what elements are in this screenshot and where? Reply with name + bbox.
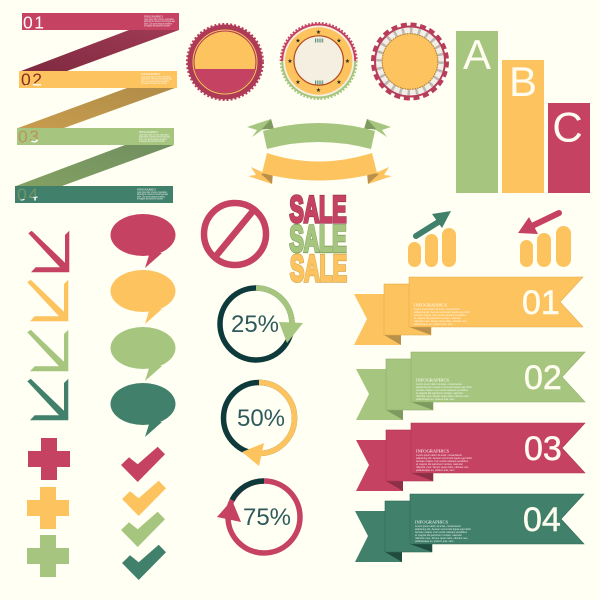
bar 03: [17, 126, 174, 146]
ribbon banner: green: [247, 119, 391, 149]
bar 03: adipiscing elit. Aenean commodo ligula eget: [139, 135, 170, 139]
bar 01: et magnis dis parturient montes: [144, 24, 170, 28]
ribbon 03: 03: [524, 430, 562, 468]
bar 04: et magnis dis parturient montes: [137, 197, 163, 201]
ribbon 03: ridiculus mus. Donec quam felis, ultricies nec,: [416, 465, 469, 469]
sale green: [290, 218, 346, 260]
ribbon 01: adipiscing elit. Aenean commodo ligula eget dolor: [414, 310, 470, 314]
speech bubble teal: [110, 383, 176, 437]
progress ring 75%: [217, 481, 300, 553]
bar 03: et magnis dis parturient montes: [139, 139, 165, 143]
ribbon 03: Aenean massa. Cum sociis natoque penatibus: [416, 459, 469, 463]
ribbon 04: adipiscing elit. Aenean commodo ligula eget dolor: [415, 527, 471, 531]
ribbon 01: pellentesque eu, pretium quis, sem.: [414, 322, 453, 326]
bar 02: dolor. Cum sociis natoque penatibus: [141, 79, 169, 83]
fold 3: [16, 145, 174, 186]
ribbon 02: et magnis dis parturient montes, nascetur: [416, 391, 463, 395]
bar A: A: [463, 31, 491, 78]
sale yellow: SALE: [290, 248, 347, 289]
badge: star ring seal: ★: [336, 38, 342, 44]
arrow yellow: [27, 280, 68, 321]
ribbon 04: INFOGRAPHICS: [415, 520, 448, 524]
sale green: SALE: [290, 218, 346, 260]
zigzag numbered banner: [15, 12, 179, 204]
fold 1: [21, 30, 179, 71]
speech bubble crimson: [110, 214, 176, 268]
bar 01: dolor. Cum sociis natoque penatibus: [144, 21, 172, 25]
bar 04: Lorem ipsum dolor sit amet, consectetuer: [137, 190, 167, 194]
check teal: [122, 545, 166, 580]
bar 01: 01: [23, 12, 44, 32]
icon: prohibition sign: [204, 203, 266, 265]
icon: falling bars with arrow: [518, 213, 571, 267]
check yellow: [122, 481, 166, 516]
ribbon 02: 02: [524, 359, 562, 397]
progress ring 50%: 50%: [237, 405, 285, 432]
badge: star ring seal: ★: [287, 58, 293, 65]
cross crimson: [28, 438, 70, 480]
arrow teal: [27, 379, 68, 420]
bar 02: adipiscing elit. Aenean commodo ligula eget: [141, 77, 172, 81]
ribbon 02: ridiculus mus. Donec quam felis, ultricies nec,: [416, 394, 469, 398]
arrow green: [27, 330, 68, 371]
speech bubble yellow: [110, 270, 176, 324]
ribbon 01: [354, 277, 583, 345]
ribbon 02: pellentesque eu, pretium quis, sem.: [416, 397, 455, 401]
ribbon banner: yellow: [248, 153, 392, 184]
ribbon 02: Aenean massa. Cum sociis natoque penatibus: [416, 388, 469, 392]
check green: [121, 512, 165, 547]
badge: star ring seal: ★: [336, 79, 342, 86]
arrow crimson: [28, 231, 69, 272]
ribbon 01: 01: [522, 284, 560, 322]
ribbon 04: pellentesque eu, pretium quis, sem.: [415, 539, 454, 543]
bar 04: dolor. Cum sociis natoque penatibus: [137, 194, 165, 198]
check crimson: [121, 447, 165, 482]
badge: star ring seal: ★: [345, 58, 350, 65]
badge: star ring seal: ★: [295, 79, 301, 86]
bar 02: INFOGRAPHICS: [141, 73, 160, 76]
bar 03: dolor. Cum sociis natoque penatibus: [139, 137, 167, 141]
bar 02: 02: [21, 70, 42, 90]
bar 01: Lorem ipsum dolor sit amet, consectetuer: [144, 17, 174, 21]
bar 03: INFOGRAPHICS: [139, 131, 158, 134]
bar 04: INFOGRAPHICS: [137, 188, 156, 192]
sale crimson: SALE: [290, 189, 346, 230]
ribbon 04: ridiculus mus. Donec quam felis, ultricies nec,: [415, 536, 468, 540]
bar B: B: [509, 58, 537, 105]
bar 01: [22, 12, 179, 32]
ribbon 02: INFOGRAPHICS: [416, 378, 449, 382]
bar 04: adipiscing elit. Aenean commodo ligula eget: [137, 192, 168, 196]
bar B: [502, 58, 544, 193]
icon: rising bars with arrow: [408, 211, 456, 267]
progress ring 75%: 75%: [243, 504, 291, 531]
ribbon 03: et magnis dis parturient montes, nascetur: [416, 462, 463, 466]
ribbon 02: adipiscing elit. Aenean commodo ligula eget dolor: [416, 385, 472, 389]
bar 03: 03: [18, 126, 39, 146]
bar C: C: [552, 104, 583, 150]
ribbon 02: [356, 352, 585, 420]
progress ring 25%: 25%: [231, 311, 279, 338]
bar A: [456, 31, 498, 193]
ribbon 03: adipiscing elit. Aenean commodo ligula eget dolor: [416, 456, 472, 460]
badge: star ring seal: [281, 23, 357, 99]
cross yellow: [27, 487, 69, 529]
bar 01: adipiscing elit. Aenean commodo ligula eget: [144, 19, 175, 23]
progress ring 25%: [220, 288, 303, 360]
SALE stickers: [290, 189, 347, 289]
ribbon 01: ridiculus mus. Donec quam felis, ultricies nec,: [414, 319, 467, 323]
ribbon 04: Aenean massa. Cum sociis natoque penatibus: [415, 530, 468, 534]
ribbon 04: Lorem ipsum dolor sit amet, consectetuer: [415, 524, 461, 528]
bar 04: 04: [17, 184, 38, 204]
cross green: [27, 535, 69, 577]
sale crimson: [290, 189, 346, 230]
ribbon 01: Lorem ipsum dolor sit amet, consectetuer: [414, 307, 460, 311]
bar C: [548, 103, 590, 193]
bar 04: [15, 184, 173, 204]
sale yellow: [290, 248, 347, 289]
ribbon 03: INFOGRAPHICS: [416, 448, 449, 454]
sale crimson: SALE: [290, 189, 346, 230]
stepped bars A B C: [456, 31, 590, 193]
ribbon 02: Lorem ipsum dolor sit amet, consectetuer: [416, 382, 462, 386]
sale yellow: SALE: [290, 248, 347, 289]
ribbon 01: et magnis dis parturient montes, nascetur: [414, 316, 461, 320]
sale green: SALE: [290, 218, 346, 260]
ribbon 01: INFOGRAPHICS: [414, 302, 447, 308]
bar 02: et magnis dis parturient montes: [141, 81, 167, 85]
badge: star ring seal: ★: [316, 87, 321, 94]
bar 02: Lorem ipsum dolor sit amet, consectetuer: [141, 74, 171, 78]
ribbon 04: [355, 494, 584, 562]
ribbon 03: [356, 423, 585, 491]
bar 02: [19, 70, 177, 90]
speech bubble green: [110, 327, 176, 381]
badge: star ring seal: ★: [295, 38, 301, 44]
ribbon 03: Lorem ipsum dolor sit amet, consectetuer: [416, 453, 462, 457]
badge: star ring seal: ★: [316, 29, 321, 36]
progress ring 50%: [224, 382, 294, 466]
ribbon 01: Aenean massa. Cum sociis natoque penatibus: [414, 313, 467, 317]
badge: pleated rosette: [373, 24, 447, 98]
badge: half-filled crimson seal: [187, 24, 263, 100]
bar 01: INFOGRAPHICS: [144, 16, 163, 18]
ribbon 04: et magnis dis parturient montes, nascetur: [415, 533, 462, 537]
bar 03: Lorem ipsum dolor sit amet, consectetuer: [139, 132, 169, 136]
ribbon 03: pellentesque eu, pretium quis, sem.: [416, 468, 455, 472]
ribbon 04: 04: [523, 501, 561, 539]
fold 2: [18, 88, 175, 128]
